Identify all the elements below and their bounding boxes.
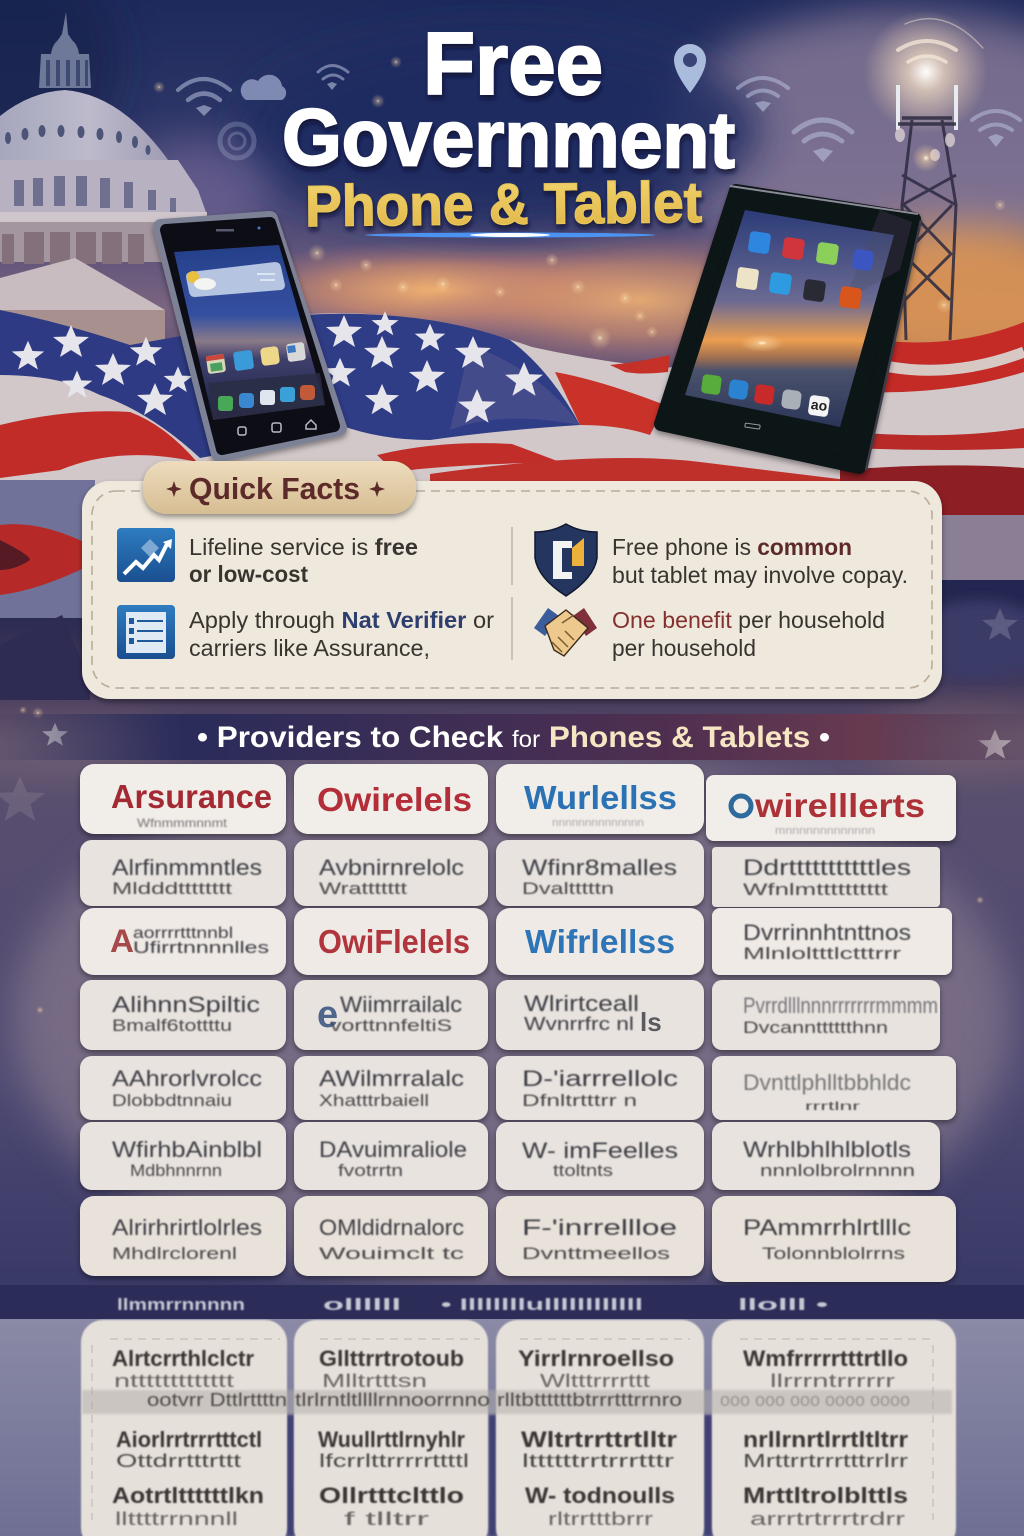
cards row 2: Dvaltttttn xyxy=(522,879,614,898)
text: free phone xyxy=(612,534,908,588)
cards row 3: aorrrrtttnnbl xyxy=(133,925,233,942)
icon: handshake xyxy=(534,608,597,656)
cards row 3: Wifrlellss xyxy=(525,923,675,960)
text: lifeline: Lifeline service is free xyxy=(189,534,418,560)
lower cards row 1: llrrrntrrrrrr xyxy=(770,1371,895,1391)
lower cards row 1: Wmfrrrrrtttrtllo xyxy=(743,1346,908,1371)
cards row 7: PAmmrrhlrtlllc xyxy=(743,1215,911,1240)
cards row 5: Dfnltrtttrr n xyxy=(522,1091,637,1110)
cards row 3: Ufirrtnnnnlles xyxy=(133,938,269,957)
panel: provider cards grid xyxy=(80,764,956,1282)
cards row 4: AlihnnSpiltic xyxy=(112,992,260,1017)
cards row 6: Wrhlbhlhlblotls xyxy=(743,1137,911,1162)
lower cards row 1 xyxy=(112,1346,910,1410)
cards row 7: Wouimclt tc xyxy=(319,1244,465,1263)
illustration: smartphone xyxy=(161,219,339,454)
illustration: tablet: ao xyxy=(810,396,828,414)
lower cards row 2: Aiorlrrtrrrtttctl xyxy=(116,1427,262,1452)
cards row 5: AAhrorlvrolcc xyxy=(112,1066,262,1091)
lower cards row 2: Mrttrrtrrrtttrrlrr xyxy=(743,1451,908,1471)
illustration: signal tower xyxy=(864,10,988,340)
heading: providers banner xyxy=(0,714,1024,760)
cards row 3 xyxy=(80,908,952,975)
cards row 5: Xhatttrbaiell xyxy=(319,1091,429,1110)
quick facts tag xyxy=(143,461,416,514)
lower cards row 3: arrrtrtrrrtrdrr xyxy=(750,1509,905,1529)
cards row 1 xyxy=(80,764,956,841)
illustration: waving American flag xyxy=(0,310,1024,516)
text: lifeline: or low-cost xyxy=(189,561,308,587)
lower cards row 2: Wuullrttlrnyhlr xyxy=(318,1427,465,1452)
cards row 7: F-'inrrellloe xyxy=(522,1215,677,1240)
section: lower blurred provider panels xyxy=(0,1319,1024,1536)
lower cards row 1: tlrlrntltllllrnnoorrnno xyxy=(295,1390,490,1410)
cards row 6 xyxy=(80,1122,940,1190)
title: Government xyxy=(282,92,735,185)
cards row 3: A xyxy=(110,923,134,959)
cards row 7 xyxy=(80,1196,956,1282)
cards row 2 xyxy=(80,840,940,907)
cards row 3: Mlnloltttlctttrrr xyxy=(743,944,902,963)
text: free phone: Free phone is common xyxy=(612,534,852,560)
cards row 4: vorttnnfeltiS xyxy=(330,1016,452,1035)
cards row 1: Owirelels xyxy=(317,781,472,818)
heading: providers banner: • Providers to Check for Phones & Tablets • xyxy=(197,721,830,754)
band: lower blurred heading: • Illlllllullllllllllll xyxy=(441,1295,643,1314)
quick facts tag: Quick Facts xyxy=(189,471,360,506)
cards row 1: nnnnnnnnnnnnnn xyxy=(552,817,644,829)
background stars and sparkles xyxy=(12,56,1006,1014)
cards row 5: rrrtlnr xyxy=(805,1099,860,1113)
cards row 6: WfirhbAinblbl xyxy=(112,1137,262,1162)
flag continuation at panel sides xyxy=(0,480,1024,700)
cards row 5 xyxy=(80,1056,956,1120)
cards row 4: e xyxy=(317,994,338,1036)
icon: growth chart xyxy=(117,528,175,582)
cards row 4: Pvrrdlllnnnrrrrrrrmmmm xyxy=(743,993,938,1018)
title: Free xyxy=(423,14,603,113)
cards row 5: D-'iarrrellolc xyxy=(522,1066,678,1091)
band: lower blurred heading: llmmrrnnnnn xyxy=(117,1295,245,1314)
cards row 1: Wurlellss xyxy=(524,779,677,816)
cards row 2: Alrfinmmntles xyxy=(112,855,262,880)
cards row 7: Dvnttmeellos xyxy=(522,1244,670,1263)
lower cards row 3: Mrttltrolblttls xyxy=(743,1483,908,1508)
lower cards row 1: nttttttttttttt xyxy=(114,1371,234,1391)
cards row 4: ls xyxy=(640,1007,662,1037)
title underline glow xyxy=(365,232,655,238)
cards row 2: Ddrtttttttttttles xyxy=(743,855,911,880)
icon: document list xyxy=(117,605,175,659)
lower cards row 3: Ollrtttclttlo xyxy=(319,1483,464,1508)
cards row 5: Dvnttlphlltbbhldc xyxy=(743,1070,911,1095)
cards row 1: Wfnmmmnnmt xyxy=(137,816,228,830)
cards row 2: Avbnirnrelolc xyxy=(319,855,464,880)
cards row 5: AWilmrralalc xyxy=(319,1066,464,1091)
cards row 3: Dvrrinnhtnttnos xyxy=(743,920,911,945)
illustration: capitol building xyxy=(0,12,207,345)
cards row 4: Wlrirtceall xyxy=(524,991,639,1016)
lower cards row 1: Yirrlrnroellso xyxy=(518,1346,674,1371)
cards row 6: fvotrrtn xyxy=(338,1161,403,1180)
cards row 7: Alrirhrirtlolrles xyxy=(112,1215,262,1240)
cards row 1: wirelllerts xyxy=(754,787,925,824)
band: lower blurred heading: llolll • xyxy=(738,1295,828,1314)
lower cards row 3: f tlltrr xyxy=(344,1509,429,1529)
lower cards row 2 xyxy=(116,1427,908,1471)
band: lower blurred heading xyxy=(0,1285,1024,1319)
panel: quick facts xyxy=(82,461,942,699)
lower cards row 3: rltrrtttbrrr xyxy=(548,1509,653,1529)
cards row 7: Mhdlrclorenl xyxy=(112,1244,237,1263)
lower cards row 1: Gllttrrtrotoub xyxy=(319,1346,464,1371)
cards row 6: ttoltnts xyxy=(553,1161,613,1180)
cards row 7: Tolonnblolrrns xyxy=(762,1244,905,1263)
lower cards row 1: Alrtcrrthlclctr xyxy=(112,1346,254,1371)
cards row 2: Wrattttttt xyxy=(319,879,407,898)
lower cards row 2: Ottdrrtttrttt xyxy=(116,1451,241,1471)
lower cards row 2: Wltrtrrttrtlltr xyxy=(521,1427,678,1452)
cards row 5: Dlobbdtnnaiu xyxy=(112,1091,232,1110)
lower cards row 1: Wltttrrrrttt xyxy=(540,1371,650,1391)
cards row 4: Bmalf6tottttu xyxy=(112,1016,232,1035)
cards row 4: Wiimrrailalc xyxy=(340,992,462,1017)
text: apply: carriers like Assurance, xyxy=(189,635,430,661)
cards row 2: Wfinr8malles xyxy=(522,855,677,880)
text: lifeline xyxy=(189,534,418,587)
cards row 2: Mldddtttttttt xyxy=(112,879,232,898)
cards row 6: Mdbhnnrnn xyxy=(130,1161,222,1180)
lower cards row 2: nrllrnrtlrrtltltrr xyxy=(743,1427,908,1452)
cards row 4 xyxy=(80,980,940,1050)
lower cards row 1: Mlltrtttsn xyxy=(322,1371,427,1391)
lower cards row 1: ooo ooo ooo oooo oooo xyxy=(720,1390,910,1410)
icons: wifi, pin and cloud xyxy=(178,44,1020,162)
band: lower blurred heading: ollllll xyxy=(323,1295,401,1314)
cards row 1: mnnnnnnnnnnnnn xyxy=(775,825,875,837)
lower cards row 3: llttttrrnnnll xyxy=(115,1509,238,1529)
text: free phone: but tablet may involve copay. xyxy=(612,562,908,588)
text: one benefit: per household xyxy=(612,635,756,661)
text: apply xyxy=(189,607,494,661)
text: one benefit xyxy=(612,607,885,661)
text: apply: Apply through Nat Verifier or xyxy=(189,607,494,633)
background outline stars xyxy=(0,613,1018,821)
lower cards row 3 xyxy=(112,1483,908,1529)
lower cards row 3: W- todnoulls xyxy=(525,1483,675,1508)
cards row 4: Wvnrrfrc nl xyxy=(524,1014,634,1034)
title xyxy=(282,14,735,239)
icon: shield xyxy=(535,524,597,596)
cards row 3: OwiFlelels xyxy=(318,923,470,960)
cards row 6: DAvuimraliole xyxy=(319,1137,467,1162)
lower cards row 3: Aotrtlttttttlkn xyxy=(112,1483,264,1508)
lower cards row 1: rlltbttttttbtrrrtttrrnro xyxy=(497,1390,682,1410)
cards row 1: Arsurance xyxy=(111,778,272,815)
cards row 4: Dvcanntttttthnn xyxy=(743,1018,888,1037)
cards row 2: Wfnlmtttttttttt xyxy=(743,880,888,899)
illustration: tablet xyxy=(661,186,921,470)
lower cards row 1: ootvrr Dttlrttttn xyxy=(147,1390,287,1410)
lower cards row 2: lfcrrlttrrrrrttttl xyxy=(319,1451,469,1471)
text: one benefit: One benefit per household xyxy=(612,607,885,633)
cards row 6: W- imFeelles xyxy=(522,1138,678,1163)
cards row 7: OMldidrnalorc xyxy=(319,1215,464,1240)
lower cards row 2: lttttttrrtrrrtttr xyxy=(522,1451,674,1471)
cards row 6: nnnlolbrolrnnnn xyxy=(760,1161,915,1180)
title: Phone & Tablet xyxy=(305,170,702,239)
